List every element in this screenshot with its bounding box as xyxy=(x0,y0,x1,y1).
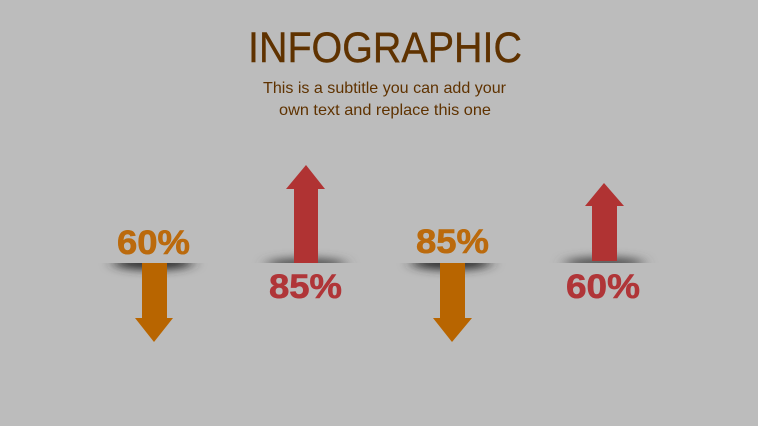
indicator: 60% up xyxy=(564,183,644,306)
arrow up xyxy=(286,165,325,263)
shadow xyxy=(564,257,644,269)
value: 60% xyxy=(566,268,640,306)
subtitle xyxy=(263,80,507,119)
value: 85% xyxy=(269,268,342,306)
infographic canvas xyxy=(105,32,650,342)
title: INFOGRAPHIC xyxy=(248,24,522,72)
value: 60% xyxy=(117,224,190,262)
indicator: 85% down xyxy=(411,223,491,342)
shadow xyxy=(266,258,346,270)
indicator: 85% up xyxy=(266,165,346,306)
shadow xyxy=(411,256,491,270)
subtitle: own text and replace this one xyxy=(279,102,491,119)
value: 85% xyxy=(416,223,489,261)
arrow down xyxy=(433,263,472,342)
arrow up xyxy=(585,183,624,261)
shadow xyxy=(113,256,193,270)
indicator: 60% down xyxy=(113,224,193,342)
arrow down xyxy=(135,263,173,342)
subtitle: This is a subtitle you can add your xyxy=(263,80,507,97)
